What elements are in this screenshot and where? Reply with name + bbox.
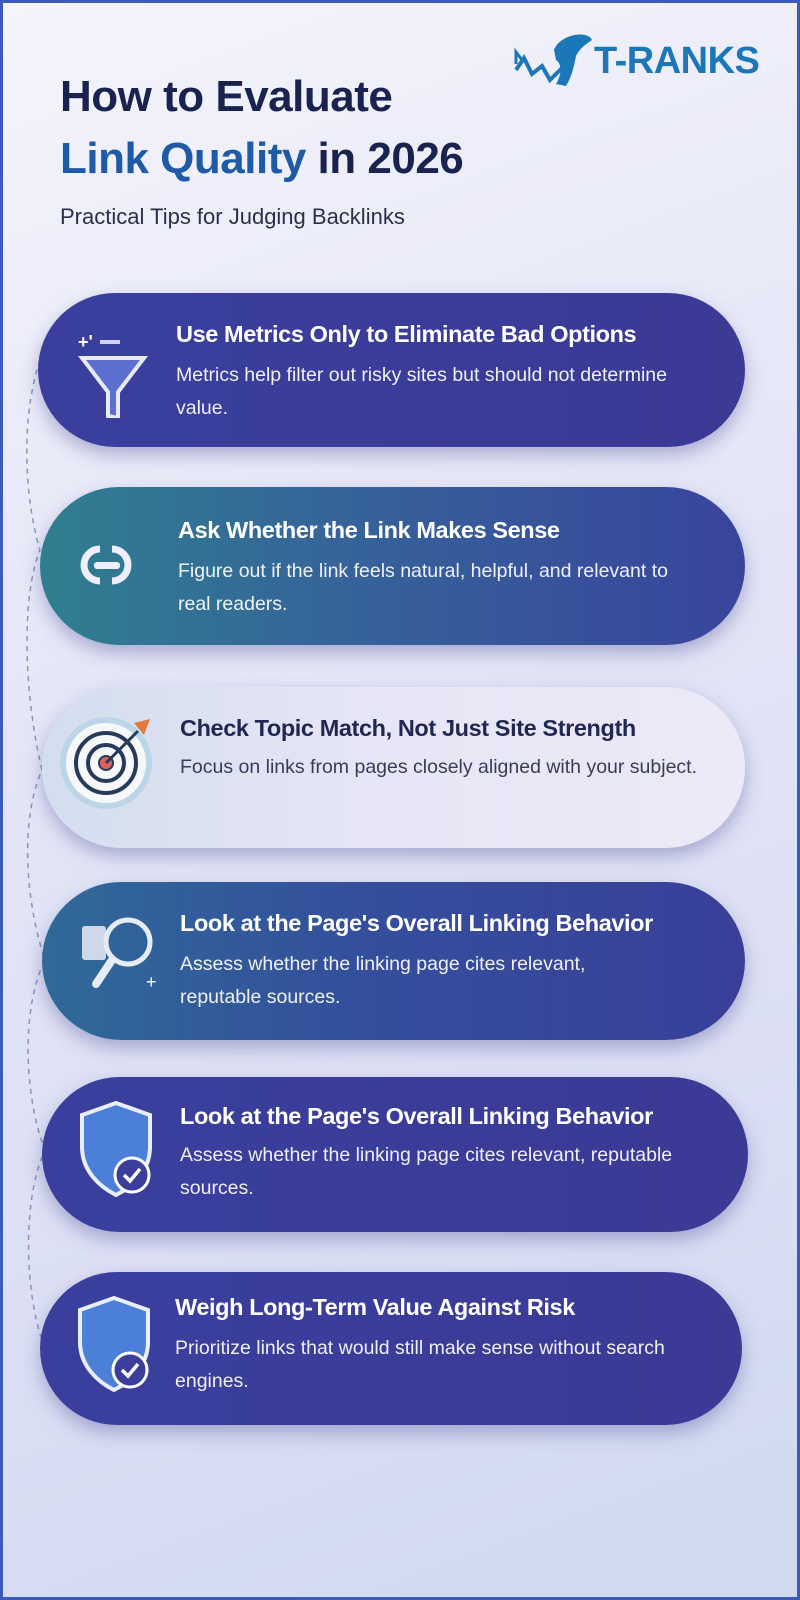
panel: card 4 linking behavior: Assess whether the linking page cites relevant,	[180, 953, 585, 975]
title	[60, 72, 463, 183]
panel: card 2 link sense: Figure out if the link feels natural, helpful, and relevant to	[178, 560, 668, 582]
panel: card 1 metrics: value.	[176, 397, 228, 419]
panel: card 2 link sense: real readers.	[178, 593, 287, 615]
title: How to Evaluate	[60, 72, 392, 121]
icon: magnifier	[82, 918, 157, 992]
panel: card 5 linking behavior repeat: sources.	[180, 1177, 254, 1199]
logo	[514, 34, 759, 86]
panel: card 6 long-term value: Prioritize links that would still make sense without search	[175, 1337, 665, 1359]
panel: card 2 link sense: Ask Whether the Link Makes Sense	[178, 517, 560, 543]
title: Link Quality in 2026	[60, 134, 463, 183]
panel: card 4 linking behavior: reputable sources.	[180, 986, 340, 1008]
panel: card 1 metrics: Metrics help filter out risky sites but should not determine	[176, 364, 667, 386]
panel: card 3 topic match: Focus on links from pages closely aligned with your subject.	[180, 756, 697, 778]
panel: card 1 metrics: Use Metrics Only to Eliminate Bad Options	[176, 321, 636, 347]
panel: card 5 linking behavior repeat: Assess whether the linking page cites relevant, reputable	[180, 1144, 672, 1166]
panel: card 5 linking behavior repeat	[42, 1077, 748, 1232]
icon: funnel	[78, 332, 148, 418]
icon: shield	[80, 1100, 152, 1198]
panel: card 1 metrics	[38, 293, 745, 447]
subtitle: Practical Tips for Judging Backlinks	[60, 204, 405, 229]
icon: chain link	[80, 546, 132, 584]
panel: card 6 long-term value: Weigh Long-Term Value Against Risk	[175, 1294, 575, 1320]
icon: magnifier: +	[146, 972, 157, 992]
panel: card 6 long-term value	[40, 1272, 742, 1425]
icon: funnel: +'	[78, 332, 93, 352]
panel: card 4 linking behavior	[42, 882, 745, 1040]
panel: card 3 topic match	[42, 687, 745, 848]
panel: card 4 linking behavior: Look at the Page's Overall Linking Behavior	[180, 910, 653, 936]
panel: card 6 long-term value: engines.	[175, 1370, 249, 1392]
logo: T-RANKS	[594, 40, 759, 82]
icon: target	[60, 717, 152, 809]
panel: card 5 linking behavior repeat: Look at the Page's Overall Linking Behavior	[180, 1103, 653, 1129]
panel: card 2 link sense	[40, 487, 745, 645]
panel: card 3 topic match: Check Topic Match, Not Just Site Strength	[180, 715, 636, 741]
icon: shield check	[78, 1296, 150, 1392]
